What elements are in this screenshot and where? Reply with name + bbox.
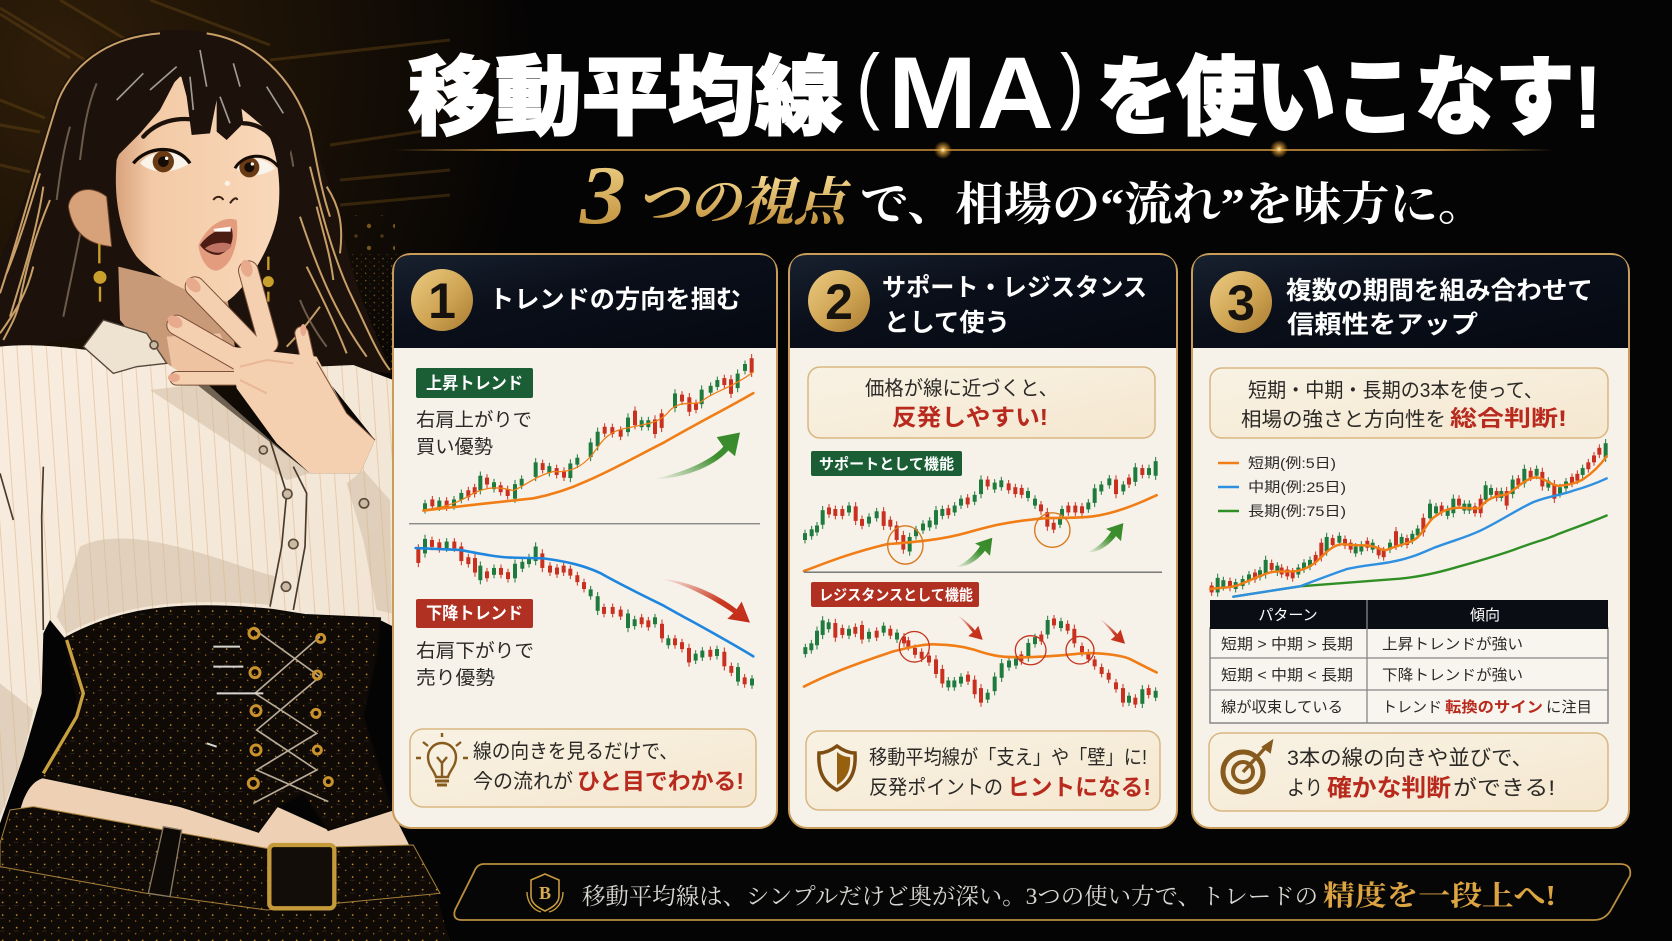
table rows: に注目 bbox=[1546, 699, 1592, 716]
arrows: down bbox=[957, 614, 1125, 644]
nose bbox=[213, 197, 237, 203]
subtitle: つの視点 bbox=[636, 175, 852, 232]
panel 2: support and resistance bbox=[789, 254, 1177, 828]
table rows bbox=[1221, 636, 1592, 716]
panel 3: multiple periods bbox=[1192, 254, 1629, 828]
table rows: 上昇トレンドが強い bbox=[1382, 636, 1523, 653]
uptrend badge: 上昇トレンド bbox=[426, 374, 523, 393]
table rows: トレンド bbox=[1382, 699, 1442, 716]
panel 1 header: 1 bbox=[428, 273, 456, 329]
support badge bbox=[811, 451, 962, 476]
subtitle: 3 bbox=[579, 149, 626, 242]
downtrend text: 売り優勢 bbox=[416, 667, 495, 689]
table rows: 下降トレンドが強い bbox=[1382, 667, 1523, 684]
eye: left bbox=[140, 152, 190, 171]
icon: light bulb bbox=[416, 733, 468, 785]
resistance badge: レジスタンスとして機能 bbox=[819, 586, 973, 604]
shirt bbox=[0, 345, 393, 823]
shirt shading bbox=[0, 383, 392, 817]
downtrend badge bbox=[416, 599, 533, 628]
title bbox=[408, 36, 1601, 150]
eye: right bbox=[236, 158, 275, 175]
tip box 2 bbox=[806, 731, 1160, 810]
downtrend text bbox=[416, 640, 534, 689]
icon: shield bbox=[819, 746, 855, 790]
title: 移動平均線 bbox=[408, 50, 842, 146]
downtrend candlestick chart bbox=[416, 543, 753, 682]
table rows: 線が収束している bbox=[1221, 699, 1343, 716]
arrow: down bbox=[660, 579, 750, 623]
hand bbox=[165, 258, 375, 473]
banner text: 移動平均線は、シンプルだけど奥が深い。3つの使い方で、トレードの bbox=[582, 884, 1318, 909]
resistance chart bbox=[804, 614, 1157, 701]
face bbox=[116, 77, 279, 302]
panel 2 header: 2 bbox=[825, 274, 853, 330]
emblem bbox=[527, 874, 563, 912]
panel 2 header: として使う bbox=[884, 309, 1010, 337]
top message: 反発しやすい! bbox=[892, 404, 1048, 430]
panel 2 header: サポート・レジスタンス bbox=[882, 274, 1147, 302]
uptrend text: 買い優勢 bbox=[416, 436, 493, 458]
banner text bbox=[582, 880, 1556, 912]
tip box 2: 反発ポイントの bbox=[869, 776, 1003, 799]
arrow: up bbox=[653, 432, 740, 479]
shirt buttons bbox=[150, 341, 369, 591]
legend bbox=[1218, 455, 1346, 519]
tip box 3 bbox=[1209, 733, 1608, 811]
legend: 中期(例:25日) bbox=[1248, 479, 1346, 495]
support chart bbox=[804, 468, 1157, 571]
legend: 長期(例:75日) bbox=[1248, 503, 1346, 519]
support badge: サポートとして機能 bbox=[819, 455, 954, 473]
tip box 1: 線の向きを見るだけで、 bbox=[473, 740, 678, 763]
uptrend text: 右肩上がりで bbox=[416, 409, 532, 431]
belt bbox=[0, 807, 440, 910]
multi-MA candlestick chart bbox=[1210, 450, 1607, 597]
tip box 1: 今の流れが bbox=[473, 770, 573, 793]
subtitle bbox=[579, 149, 1486, 242]
table header bbox=[1210, 600, 1608, 629]
tip box 3: より bbox=[1287, 777, 1323, 800]
mouth bbox=[198, 219, 237, 271]
bottom banner bbox=[454, 864, 1630, 920]
icon: target with arrow bbox=[1223, 741, 1272, 792]
banner text: 精度を一段上へ! bbox=[1323, 880, 1556, 912]
table rows: 短期 < 中期 < 長期 bbox=[1221, 667, 1353, 684]
subtitle: で、相場の“流れ”を味方に。 bbox=[860, 179, 1486, 230]
corset lacing bbox=[43, 628, 332, 803]
top message: 価格が線に近づくと、 bbox=[865, 377, 1058, 400]
panel 3 header: 信頼性をアップ bbox=[1287, 311, 1478, 339]
illustration: surprised woman bbox=[0, 30, 450, 941]
arrows: up bbox=[955, 523, 1123, 567]
title: を使いこなす! bbox=[1097, 50, 1601, 146]
tip box 1 bbox=[410, 729, 756, 807]
hair back bbox=[0, 30, 392, 373]
panel 3 header bbox=[1193, 255, 1628, 348]
tip box 3: 3本の線の向きや並びで、 bbox=[1287, 747, 1533, 770]
panel 1 header: トレンドの方向を掴む bbox=[489, 286, 741, 314]
table header: パターン bbox=[1258, 607, 1318, 624]
downtrend badge: 下降トレンド bbox=[426, 604, 523, 623]
emblem: B bbox=[539, 883, 551, 903]
title: ) bbox=[1060, 37, 1084, 131]
top message: 総合判断! bbox=[1450, 406, 1567, 431]
table header: 傾向 bbox=[1470, 607, 1500, 624]
corset bbox=[40, 606, 392, 832]
earrings bbox=[95, 243, 273, 302]
eyebrows bbox=[143, 119, 272, 137]
table rows: 転換のサイン bbox=[1445, 698, 1543, 716]
table bbox=[1210, 600, 1608, 723]
gold divider with sparkles bbox=[395, 140, 1555, 159]
top message: 短期・中期・長期の3本を使って、 bbox=[1248, 379, 1543, 402]
hair highlights bbox=[0, 33, 390, 370]
midriff bbox=[20, 776, 413, 853]
uptrend candlestick chart bbox=[423, 366, 753, 511]
tip box 3: ができる! bbox=[1453, 777, 1555, 800]
tip box 3: 確かな判断 bbox=[1327, 775, 1451, 802]
downtrend text: 右肩下がりで bbox=[416, 640, 534, 662]
pants bbox=[0, 843, 450, 941]
tip box 2: ヒントになる! bbox=[1007, 774, 1151, 800]
neck bbox=[118, 267, 240, 380]
panel 1: trend direction bbox=[393, 254, 777, 828]
uptrend text bbox=[416, 409, 532, 458]
table rows: 短期 > 中期 > 長期 bbox=[1221, 636, 1353, 653]
panel 2 header bbox=[790, 255, 1176, 348]
shirt collar bbox=[83, 320, 167, 373]
legend: 短期(例:5日) bbox=[1248, 455, 1336, 471]
panel 3 header: 3 bbox=[1227, 275, 1255, 331]
belt buckle bbox=[269, 845, 334, 908]
uptrend badge bbox=[416, 368, 533, 398]
tip box 1: ひと目でわかる! bbox=[577, 768, 744, 794]
bangs bbox=[97, 33, 293, 187]
title: ( bbox=[856, 37, 880, 131]
resistance badge bbox=[811, 582, 979, 607]
top message bbox=[1210, 368, 1608, 438]
panel 3 header: 複数の期間を組み合わせて bbox=[1286, 277, 1593, 305]
tip box 2: 移動平均線が「支え」や「壁」に! bbox=[869, 746, 1147, 769]
title: MA bbox=[888, 36, 1054, 150]
panel 1 header bbox=[394, 255, 776, 348]
top message: 相場の強さと方向性を bbox=[1241, 408, 1446, 431]
ear bbox=[68, 190, 112, 247]
top message bbox=[808, 367, 1155, 438]
